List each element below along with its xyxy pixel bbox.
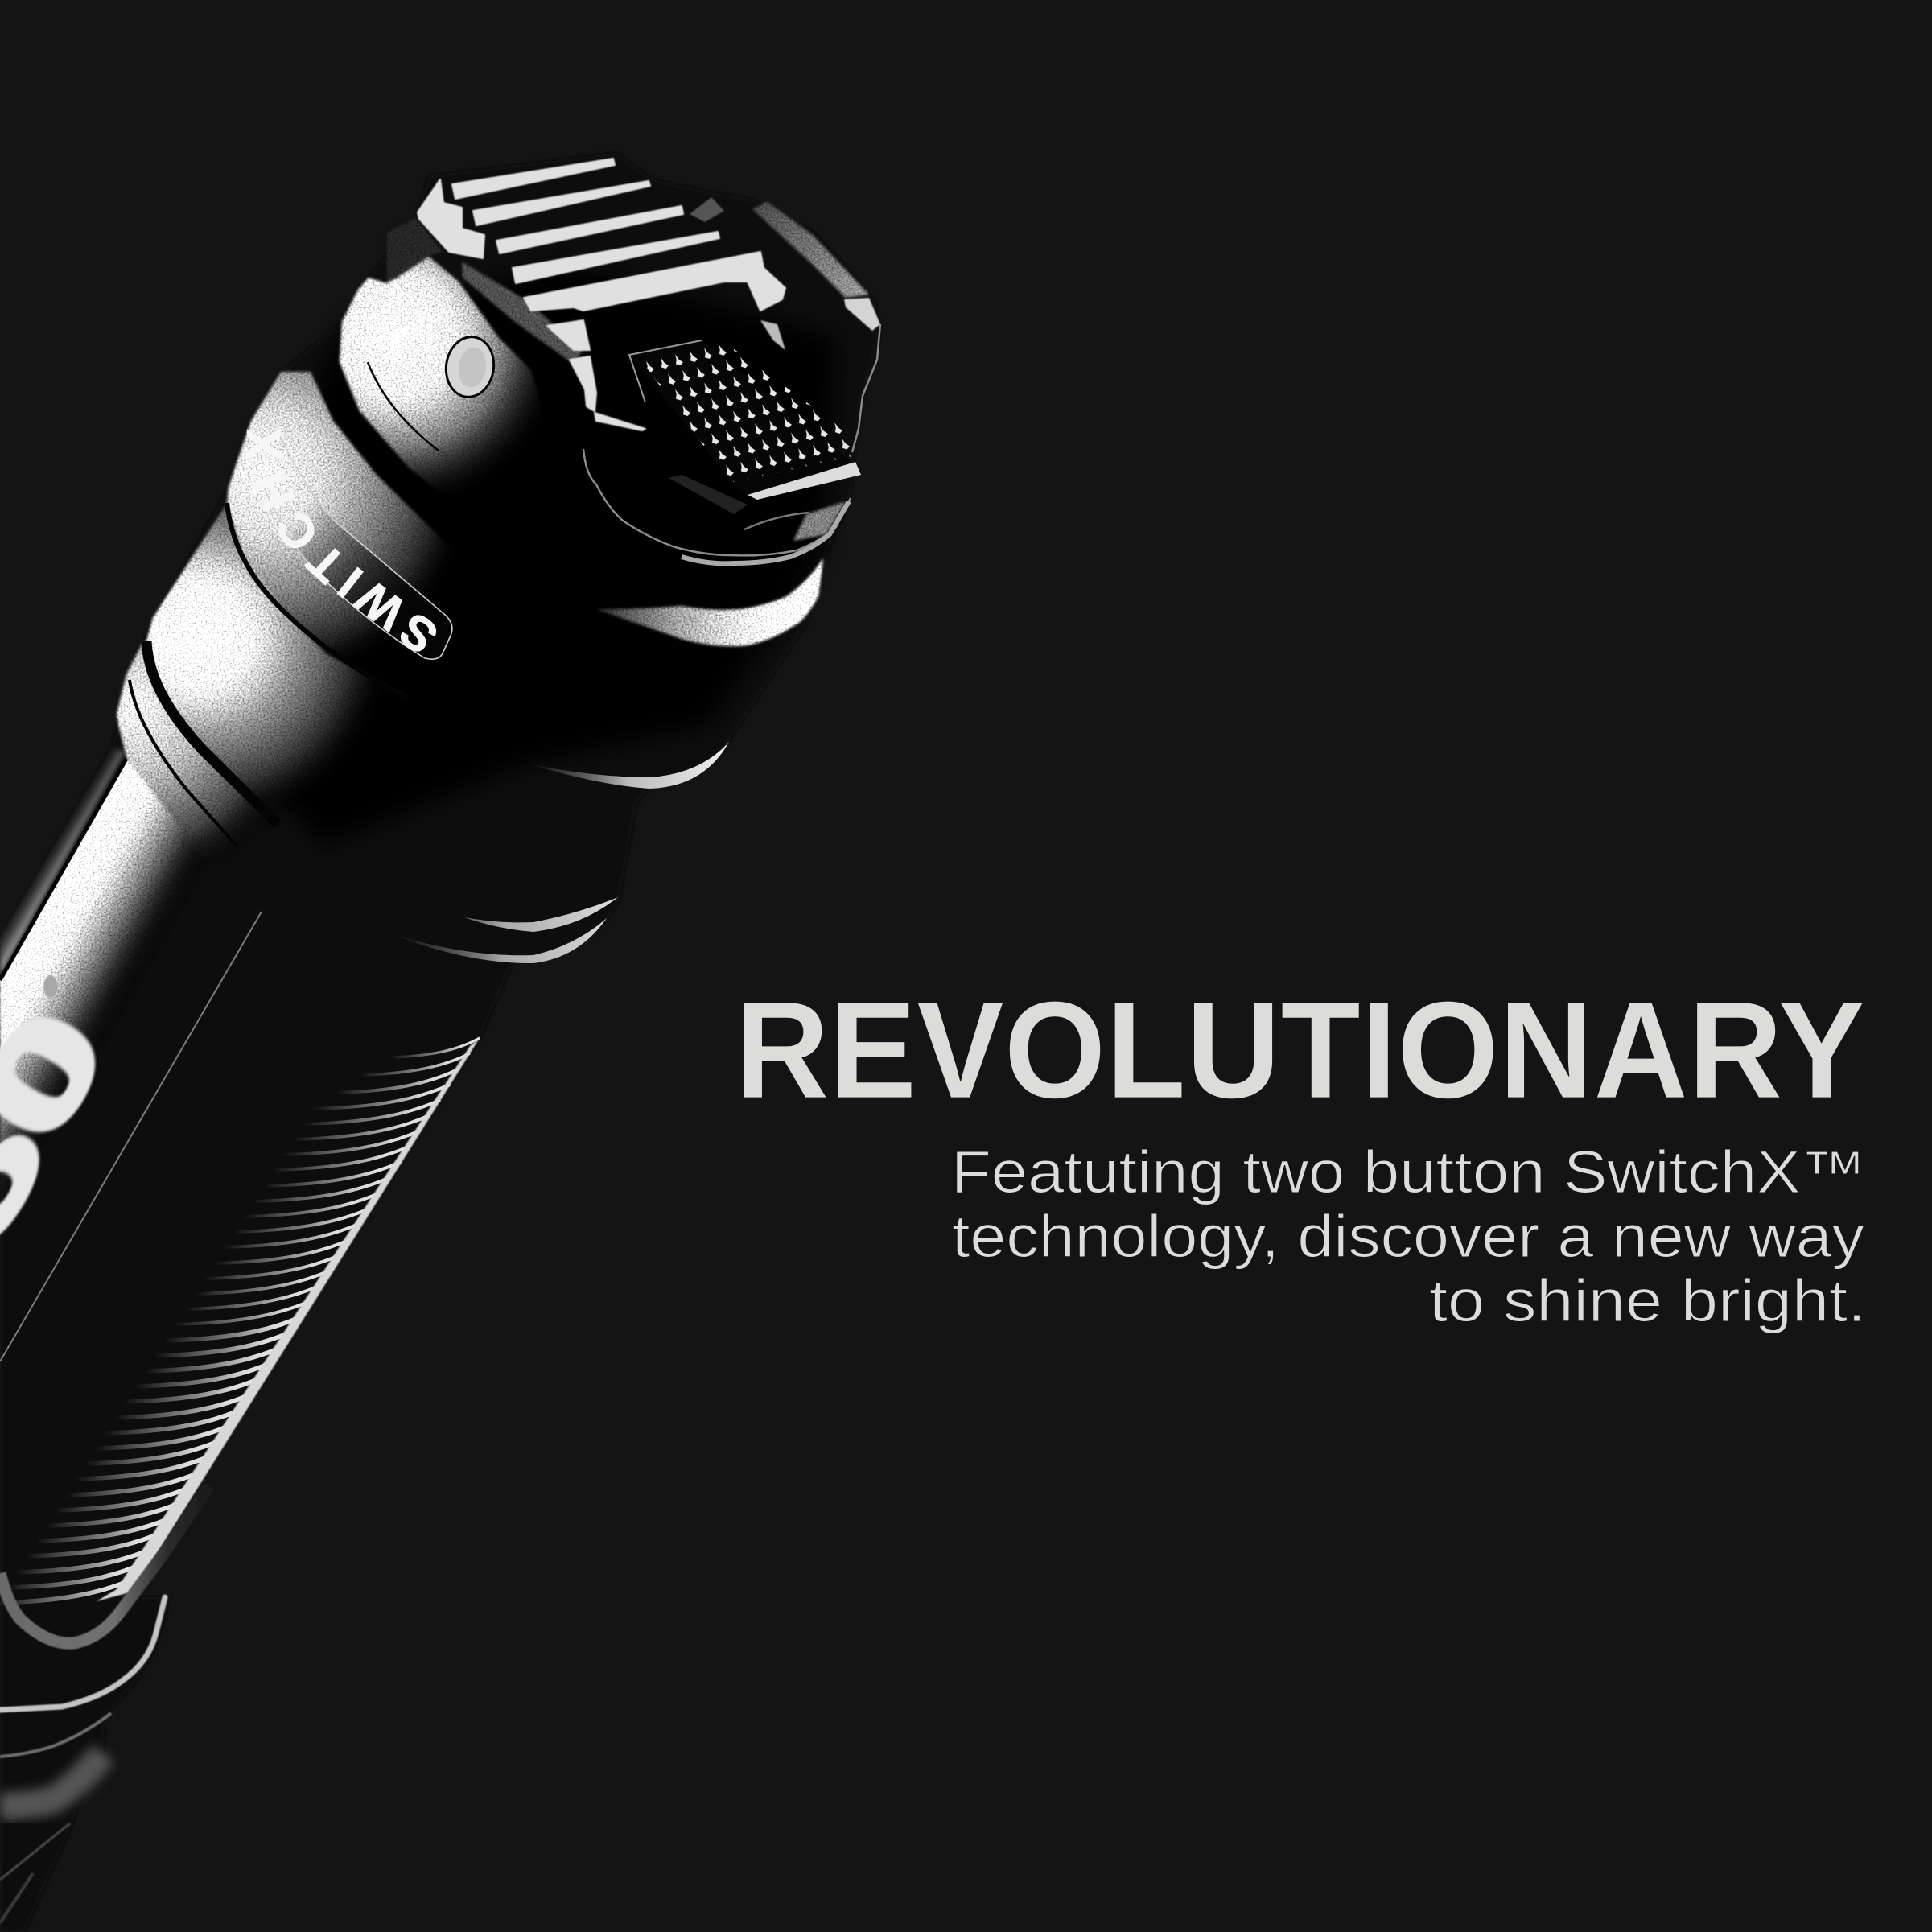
knurled grip [0, 1038, 480, 1603]
button shadow ledge [669, 475, 748, 514]
top shoulder [386, 217, 443, 283]
tube groove [0, 759, 126, 980]
button pad [629, 340, 859, 498]
tube highlight [0, 759, 210, 1207]
title: REVOLUTIONARY [735, 974, 1865, 1127]
bezel surface [340, 257, 563, 547]
flashlight silhouette [0, 153, 880, 1932]
upper ribbed button [418, 159, 880, 430]
pad outline [629, 340, 702, 402]
body grooves [130, 362, 439, 846]
tube edge sliver [0, 744, 125, 975]
tail rings [0, 1486, 209, 1923]
power indicator light [441, 332, 499, 402]
upper collar surface [227, 372, 499, 697]
label text: SWITCHX [246, 428, 436, 652]
lit metal surfaces [0, 201, 869, 1207]
side plate [752, 201, 869, 298]
body text: technology, discover a new way [952, 1203, 1864, 1270]
button gloss highlights [418, 179, 880, 430]
button front edge [748, 462, 861, 500]
registered mark [43, 975, 58, 998]
body text: Featuting two button SwitchX™ [951, 1139, 1866, 1205]
head body surface [146, 503, 483, 869]
collar crescent highlights [390, 742, 729, 963]
head rim lines [583, 324, 880, 563]
SwitchX label [246, 428, 453, 660]
upper lip blob [793, 501, 846, 541]
lower head lip [596, 558, 823, 646]
body text: to shine bright. [1429, 1267, 1866, 1334]
textured lower button [629, 340, 861, 514]
head core shadow [185, 266, 837, 845]
body text [951, 1139, 1866, 1334]
barrel logo [0, 975, 134, 1267]
grained button shoulder [462, 262, 583, 364]
lower ring surface [117, 641, 322, 893]
pad dot texture [640, 342, 856, 483]
barrel seam line [0, 912, 262, 1361]
label outline [264, 438, 452, 659]
